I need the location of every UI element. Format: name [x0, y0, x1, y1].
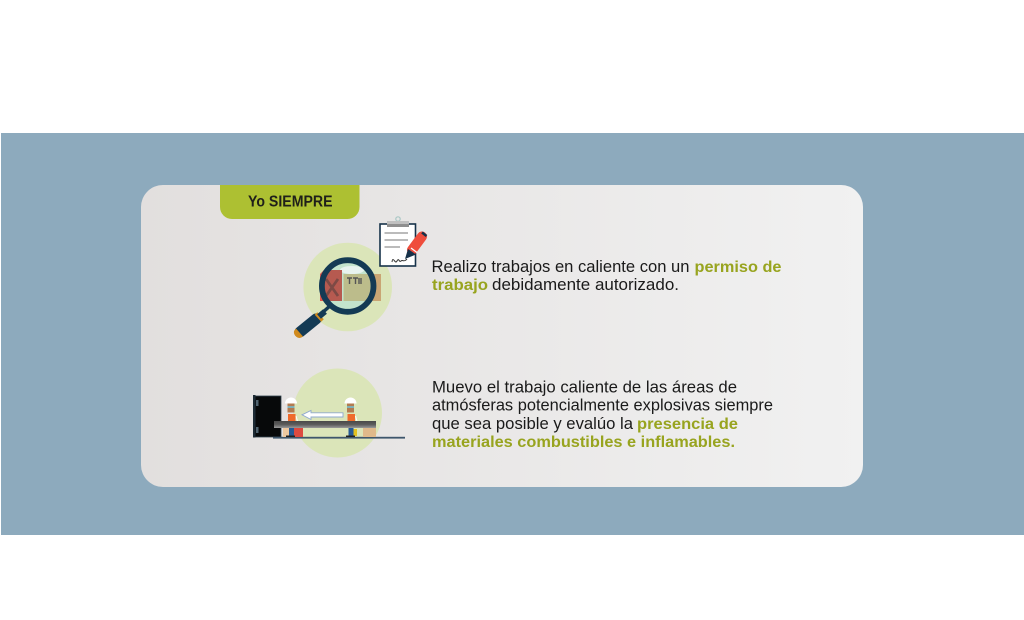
- worker left: [285, 398, 298, 437]
- text block: permiso de trabajo: debidamente autorizado.: [492, 276, 679, 294]
- text block: presencia de materiales: [432, 378, 773, 451]
- pipe: [274, 421, 376, 428]
- icon: signed permit clipboard with pen: [380, 217, 426, 266]
- background band: [1, 133, 1024, 535]
- text block: permiso de trabajo: [432, 258, 782, 294]
- text block: presencia de materiales: materiales combustibles e inflamables.: [432, 434, 735, 451]
- text block: presencia de materiales: que sea posible y evalúo la: [432, 415, 633, 433]
- arrow: [302, 410, 343, 420]
- text block: presencia de materiales: atmósferas potencialmente explosivas siempre: [432, 397, 773, 415]
- icon: magnifier over fuel can and box: [294, 243, 392, 338]
- worker right: [344, 398, 358, 437]
- text block: permiso de trabajo: Realizo trabajos en caliente con un: [432, 258, 690, 276]
- text block: permiso de trabajo: trabajo: [432, 277, 488, 294]
- boxes: [283, 427, 289, 437]
- heading tab: Yo SIEMPRE: [220, 185, 360, 219]
- door: [253, 395, 281, 438]
- floor: [273, 437, 405, 439]
- panel: card: [141, 185, 863, 487]
- text block: permiso de trabajo: permiso de: [694, 259, 782, 276]
- heading tab: Yo SIEMPRE: Yo SIEMPRE: [248, 194, 332, 210]
- text block: presencia de materiales: presencia de: [637, 416, 738, 433]
- text block: presencia de materiales: Muevo el trabajo caliente de las áreas de: [432, 378, 737, 396]
- icon: workers moving pipe away from door: [253, 368, 405, 458]
